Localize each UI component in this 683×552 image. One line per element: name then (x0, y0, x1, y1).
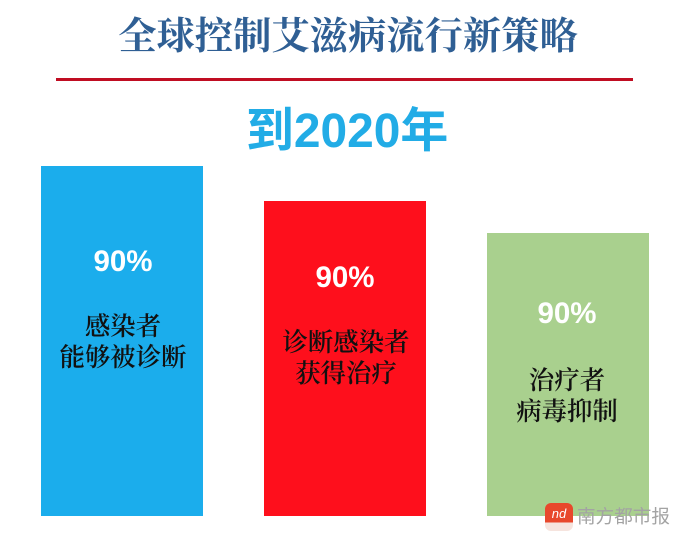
label: treated suppressed: 治疗者 (529, 367, 605, 395)
percentage: 90% suppressed: 90% (537, 297, 597, 330)
panel: diagnosed bar (41, 166, 203, 516)
label: treated suppressed (516, 367, 618, 426)
label: diagnosed treated: 诊断感染者 (283, 329, 409, 357)
label: infected diagnosed: 感染者 (85, 313, 161, 341)
title: 全球控制艾滋病流行新策略 (118, 5, 578, 60)
percentage: 90% treated: 90% (315, 261, 375, 294)
panel: suppressed bar (487, 233, 649, 516)
subtitle: by 2020: 到2020年 (246, 105, 448, 158)
red divider line (56, 78, 633, 81)
label: infected diagnosed (60, 313, 186, 372)
percentage: 90% diagnosed: 90% (93, 245, 153, 278)
label: diagnosed treated: 获得治疗 (295, 360, 397, 388)
watermark logo: nd (552, 506, 566, 521)
watermark text: 南方都市报 (577, 506, 670, 527)
watermark logo (545, 503, 573, 531)
label: diagnosed treated (283, 328, 409, 388)
label: treated suppressed: 病毒抑制 (516, 398, 618, 426)
label: infected diagnosed: 能够被诊断 (60, 344, 186, 372)
panel: treated bar (264, 201, 426, 516)
